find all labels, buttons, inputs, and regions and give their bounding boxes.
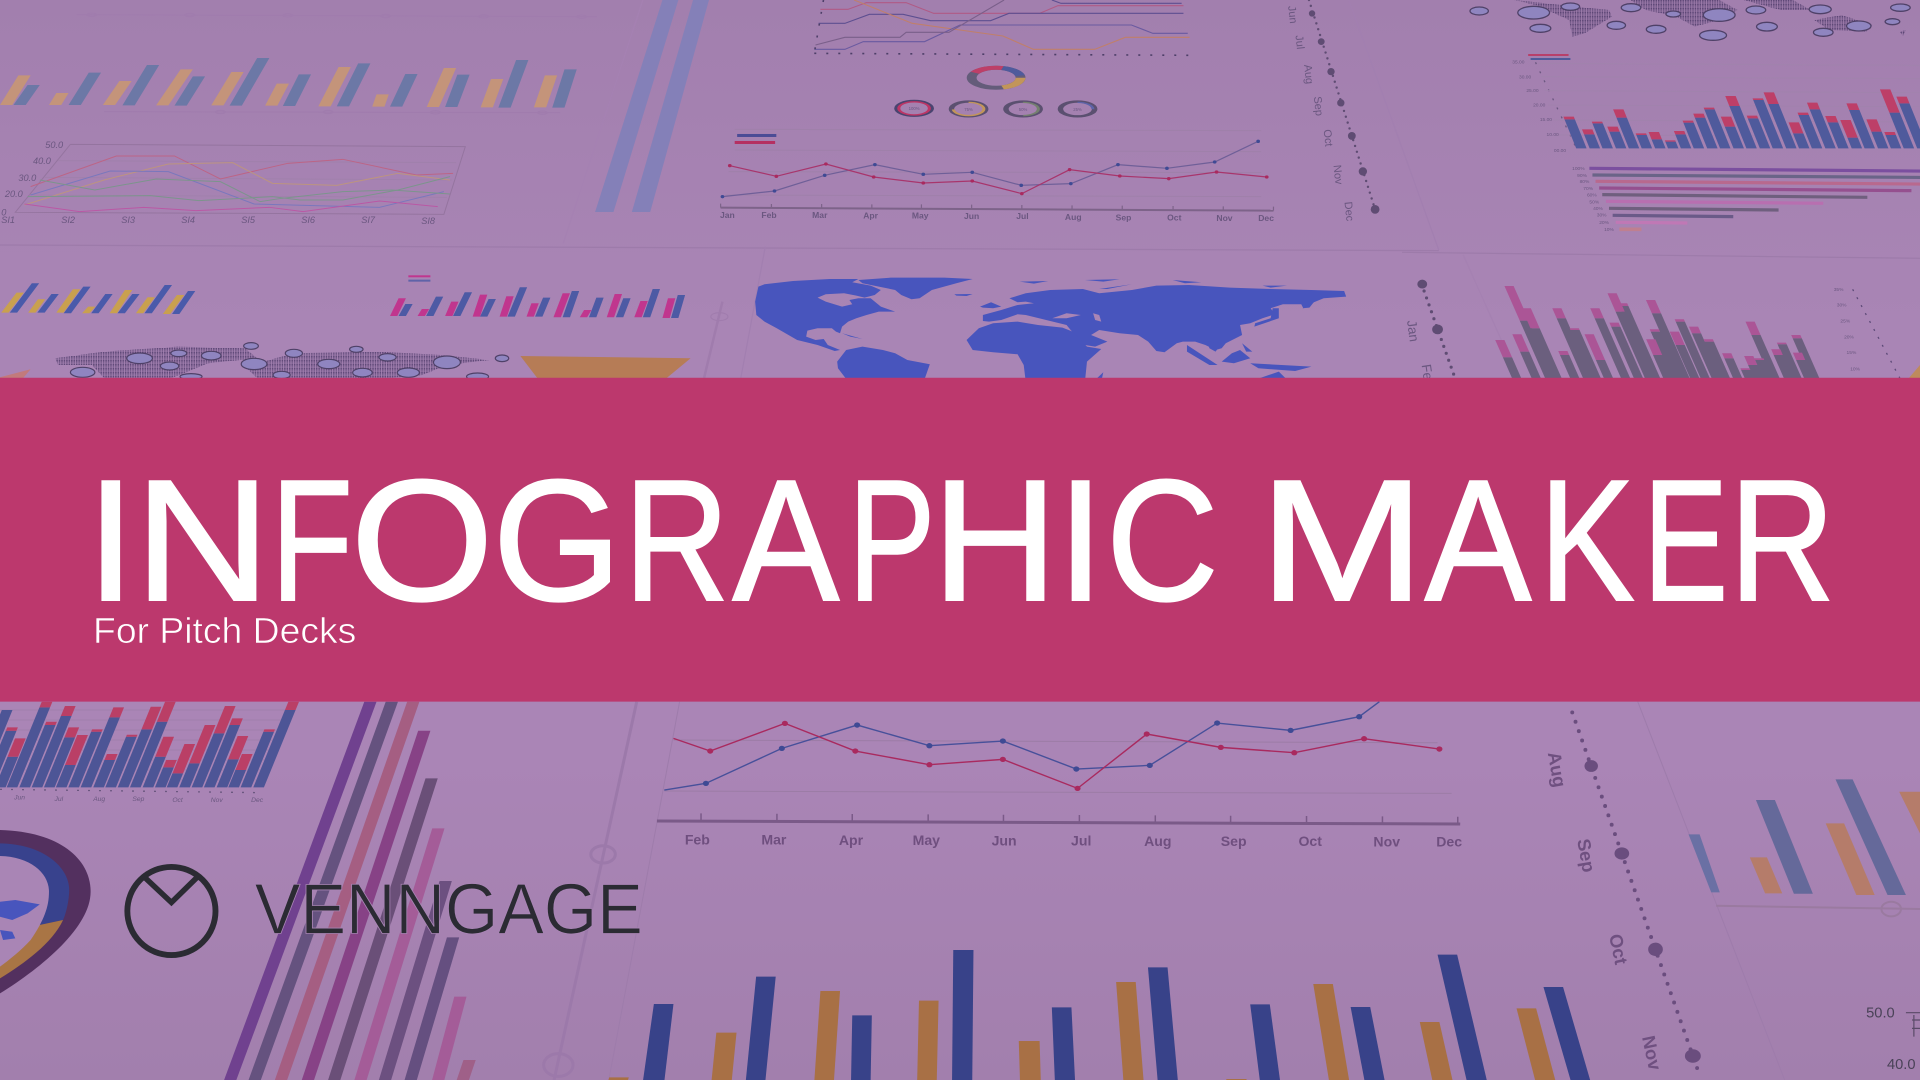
- grey chart axis labels: 25%: [1840, 319, 1851, 325]
- stacked chart axis labels: 15.00: [1540, 117, 1552, 123]
- title: H: [932, 444, 1058, 637]
- lower left chart month labels: Sep: [132, 796, 145, 803]
- donut labels: 25%: [1073, 107, 1082, 112]
- lower left chart month labels: [13, 795, 264, 804]
- 3D chart axis labels: SI2: [61, 215, 75, 225]
- logo: Venngage wordmark: VENNGAGE: [255, 871, 643, 950]
- donut labels: 75%: [964, 107, 973, 112]
- grey chart axis labels: 35%: [1834, 287, 1844, 293]
- lower left chart month labels: Oct: [172, 797, 184, 804]
- 3D chart axis labels: 50.0: [45, 140, 64, 150]
- horizontal bar labels: 50%: [1589, 199, 1600, 205]
- blue world map: [755, 278, 1346, 382]
- 3D chart axis labels: SI8: [421, 216, 436, 226]
- stacked chart axis labels: 30.00: [1519, 74, 1531, 80]
- centre chart month labels: Mar: [812, 210, 828, 220]
- 3D chart axis labels: SI5: [241, 215, 256, 225]
- title: N: [134, 444, 271, 637]
- title: C: [1106, 444, 1218, 637]
- subtitle: For Pitch Decks: [93, 610, 356, 651]
- 3D chart axis labels: SI1: [1, 215, 15, 225]
- 3D chart axis labels: 40.0: [33, 156, 52, 166]
- title: I: [1057, 444, 1104, 637]
- top timeline labels: Sep: [1311, 96, 1325, 117]
- vertical track with rings: [544, 702, 637, 1080]
- 3D chart axis labels: 30.0: [18, 173, 37, 183]
- second timeline labels: [1404, 319, 1437, 388]
- top timeline dots: [1309, 0, 1380, 214]
- centre chart month labels: [720, 210, 1274, 223]
- top timeline labels: [1285, 5, 1356, 222]
- axis numbers: bottom right: 50.0: [1866, 1006, 1895, 1022]
- title: G: [493, 444, 621, 637]
- second timeline dots: [1417, 280, 1455, 377]
- small yellow and blue bars: [1, 283, 195, 314]
- horizontal bar labels: 10%: [1604, 227, 1615, 233]
- funnel: [0, 356, 691, 380]
- bottom chart month labels: Oct: [1298, 833, 1322, 849]
- title: O: [351, 444, 494, 637]
- bottom timeline labels: Aug: [1544, 750, 1571, 789]
- bottom chart month labels: Sep: [1221, 833, 1247, 849]
- bottom chart month labels: Jul: [1071, 833, 1091, 849]
- bottom timeline labels: Sep: [1573, 837, 1600, 874]
- bottom timeline labels: Oct: [1605, 932, 1632, 966]
- upper dashboard collage: [0, 0, 1920, 382]
- horizontal bar labels: 20%: [1599, 220, 1610, 226]
- grey chart axis labels: 20%: [1844, 335, 1855, 341]
- top timeline labels: Jul: [1293, 35, 1306, 50]
- bottom chart month labels: Apr: [839, 832, 864, 848]
- horizontal bar chart: [1589, 168, 1920, 229]
- top timeline labels: Oct: [1321, 129, 1334, 147]
- title: R: [1729, 444, 1835, 637]
- stacked grey and pink bars: [1476, 286, 1920, 380]
- title: P: [848, 444, 935, 637]
- faint axes: [77, 13, 728, 378]
- second timeline labels: Jan: [1404, 319, 1422, 343]
- grey chart axis labels: 10%: [1850, 366, 1861, 372]
- centre chart month labels: Dec: [1258, 213, 1274, 223]
- bottom chart month labels: Dec: [1436, 834, 1462, 850]
- title band: [0, 378, 1920, 702]
- donut: lower left: [0, 830, 91, 993]
- lower left chart month labels: Jul: [53, 796, 64, 803]
- grey chart axis labels: [1834, 287, 1861, 372]
- top centre line chart: [814, 0, 1193, 55]
- bottom timeline dots: [1572, 712, 1701, 1075]
- 3D chart axis labels: SI3: [121, 215, 136, 225]
- line chart: centre: [721, 129, 1273, 211]
- stacked chart axis labels: 25.00: [1526, 88, 1539, 94]
- title: A: [1425, 444, 1531, 637]
- diagonal bars: [223, 702, 476, 1080]
- 3D chart axis labels: SI7: [361, 215, 376, 225]
- lower left chart month labels: Nov: [211, 797, 223, 804]
- top timeline labels: Nov: [1330, 164, 1345, 186]
- 3D chart axis labels: SI4: [181, 215, 195, 225]
- title: A: [732, 444, 839, 637]
- grey chart axis labels: 30%: [1837, 303, 1847, 309]
- lower left chart month labels: Dec: [251, 797, 264, 804]
- axis numbers: bottom right: [1866, 1006, 1916, 1073]
- 3D chart axis labels: 0: [1, 208, 7, 218]
- pink and blue bars: [390, 275, 685, 318]
- horizontal bar labels: 80%: [1580, 179, 1590, 185]
- stripes: [595, 0, 709, 212]
- small donut charts: [897, 101, 1095, 116]
- dotted axis: [0, 789, 263, 793]
- bottom chart month labels: Aug: [1144, 833, 1171, 849]
- centre chart month labels: Feb: [761, 210, 777, 220]
- stacked chart axis labels: 35.00: [1512, 60, 1525, 66]
- lower left chart month labels: Aug: [92, 796, 105, 803]
- bar chart: top left: [0, 58, 577, 108]
- 3D line chart: [15, 144, 465, 214]
- title: R: [624, 444, 729, 637]
- horizontal bar labels: 60%: [1587, 193, 1597, 199]
- lower left chart month labels: Jun: [13, 795, 25, 802]
- donut labels: [909, 106, 1082, 112]
- title: E: [1643, 444, 1728, 637]
- top timeline labels: Jun: [1285, 5, 1299, 24]
- paper edges: [609, 702, 1785, 1080]
- stacked chart axis labels: 20.00: [1533, 103, 1546, 109]
- centre chart month labels: Sep: [1116, 212, 1131, 222]
- large donut chart: [963, 64, 1030, 91]
- centre chart month labels: Jun: [964, 211, 979, 221]
- centre chart month labels: Nov: [1216, 213, 1233, 223]
- title: I: [86, 444, 136, 637]
- hatched world map: top right: [1470, 0, 1910, 40]
- top timeline labels: Aug: [1301, 64, 1315, 85]
- horizontal bar labels: 100%: [1572, 166, 1585, 172]
- 3D chart axis labels: SI6: [301, 215, 316, 225]
- centre chart month labels: Aug: [1065, 212, 1082, 222]
- paper edges: [0, 0, 1920, 378]
- bottom chart month labels: Feb: [685, 831, 710, 847]
- stacked chart axis labels: 00.00: [1554, 148, 1566, 154]
- top timeline labels: Dec: [1342, 201, 1356, 222]
- bottom chart month labels: May: [913, 832, 940, 848]
- bottom chart month labels: [685, 831, 1462, 850]
- axis ticks: bottom right: [1906, 1013, 1920, 1037]
- centre chart month labels: Jan: [720, 210, 735, 220]
- title: K: [1539, 444, 1635, 637]
- axis numbers: bottom right: 40.0: [1887, 1057, 1916, 1073]
- stacked chart axis labels: [1512, 60, 1566, 154]
- bottom line chart: [657, 702, 1460, 824]
- horizontal bar labels: 70%: [1583, 186, 1594, 192]
- logo: Venngage mark: [127, 867, 216, 955]
- 3D chart axis labels: [1, 140, 436, 226]
- stacked bar chart: lower left: [0, 702, 294, 787]
- horizontal bar labels: [1572, 166, 1615, 233]
- title: M: [1259, 444, 1425, 637]
- bottom chart month labels: Nov: [1373, 834, 1400, 850]
- centre chart month labels: Oct: [1167, 212, 1182, 222]
- centre chart month labels: Jul: [1016, 211, 1029, 221]
- horizontal bar labels: 90%: [1577, 173, 1588, 179]
- grey chart axis labels: 15%: [1847, 350, 1857, 356]
- stacked bar chart: top right: [1528, 54, 1920, 150]
- bottom timeline labels: [1544, 750, 1666, 1073]
- bottom timeline labels: Nov: [1638, 1034, 1666, 1073]
- 3D chart axis labels: 20.0: [4, 189, 24, 199]
- bottom chart month labels: Jun: [992, 833, 1017, 849]
- second timeline labels: Feb: [1419, 363, 1437, 388]
- hatched world map: left: [55, 343, 509, 380]
- horizontal bar labels: 30%: [1597, 213, 1607, 219]
- donut labels: 50%: [1019, 107, 1028, 112]
- horizontal bar labels: 40%: [1593, 206, 1603, 212]
- stacked chart axis labels: 10.00: [1547, 132, 1559, 138]
- centre chart month labels: May: [912, 211, 929, 221]
- donut labels: 100%: [909, 106, 920, 111]
- centre chart month labels: Apr: [863, 211, 879, 221]
- bottom bar chart: [608, 950, 1591, 1080]
- bottom chart month labels: Mar: [761, 831, 787, 847]
- right bar chart: [1689, 779, 1920, 916]
- title: F: [271, 444, 353, 637]
- lower dashboard collage: [0, 702, 1920, 1080]
